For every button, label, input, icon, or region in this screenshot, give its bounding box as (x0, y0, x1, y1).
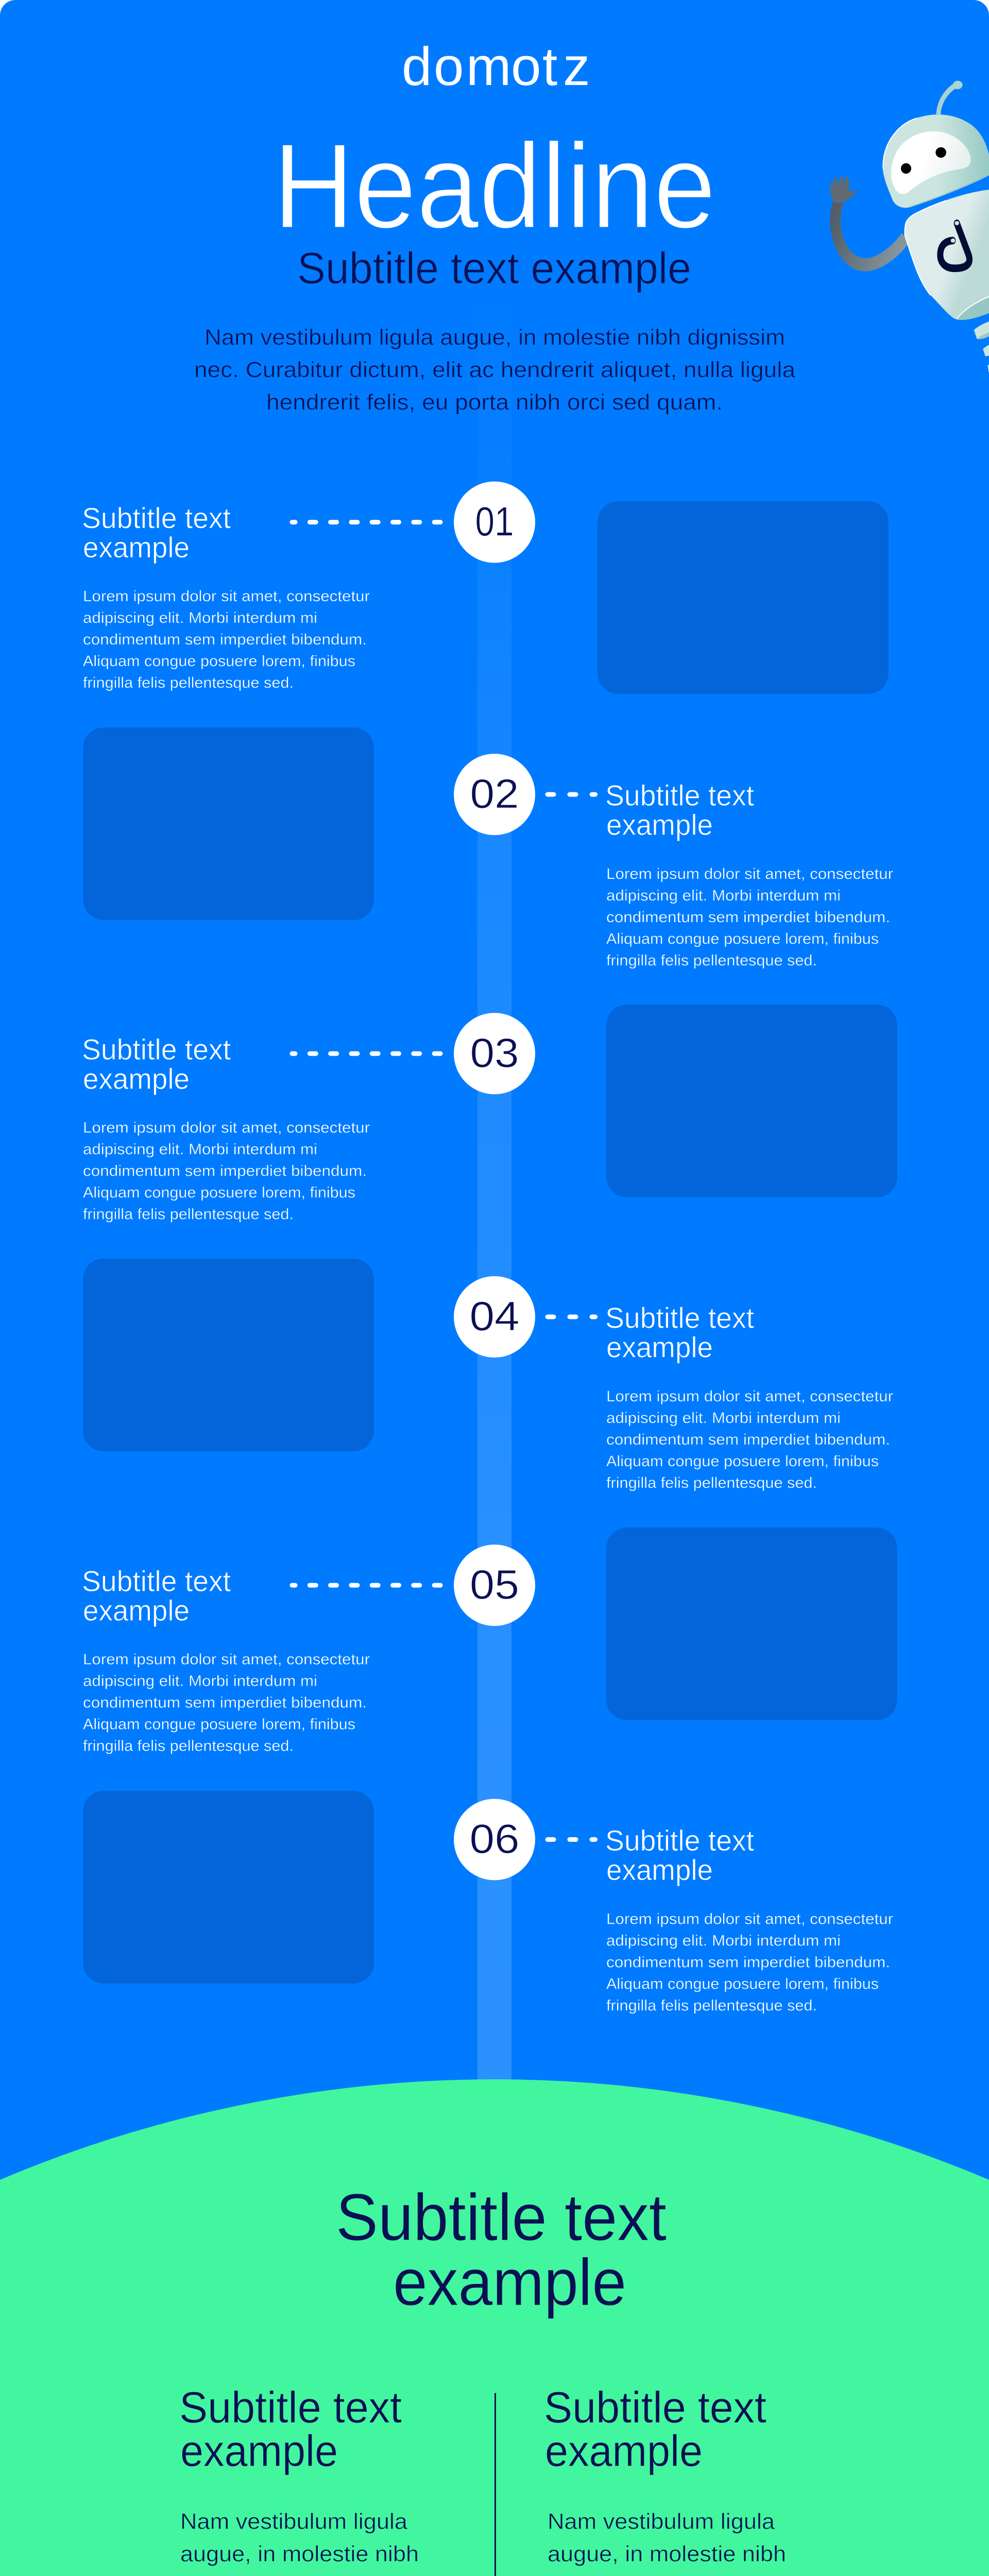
heading 05: example (83, 1594, 190, 1627)
body 02: adipiscing elit. Morbi interdum mi (606, 887, 841, 904)
robot head (882, 114, 989, 208)
robot antenna (939, 81, 963, 114)
right column heading (544, 2383, 766, 2476)
heading 01: example (83, 531, 190, 564)
left column text: augue, in molestie nibh (180, 2542, 419, 2567)
left column heading: Subtitle text (179, 2383, 402, 2432)
badge 02 (454, 754, 535, 835)
body 04 (606, 1388, 893, 1492)
heading 06 (605, 1824, 754, 1887)
badge 02: 02 (470, 771, 519, 817)
heading 04: example (606, 1331, 713, 1364)
connector 01 (292, 520, 440, 524)
body 05: Aliquam congue posuere lorem, finibus (83, 1716, 355, 1733)
heading 06: Subtitle text (605, 1824, 754, 1857)
body 01: adipiscing elit. Morbi interdum mi (83, 609, 317, 626)
body 03: Aliquam congue posuere lorem, finibus (83, 1184, 355, 1201)
robot arm (835, 201, 906, 265)
badge 05 (454, 1545, 535, 1626)
heading 05: Subtitle text (82, 1565, 231, 1598)
heading 03: example (83, 1062, 190, 1095)
body 03: fringilla felis pellentesque sed. (83, 1206, 294, 1223)
body 05: Lorem ipsum dolor sit amet, consectetur (83, 1651, 370, 1668)
image placeholder 4 (83, 1259, 374, 1451)
left column (179, 2383, 441, 2576)
heading 05 (82, 1565, 231, 1627)
heading 04: Subtitle text (605, 1301, 754, 1334)
body 03: Lorem ipsum dolor sit amet, consectetur (83, 1119, 370, 1137)
connector 05 (292, 1583, 440, 1588)
timeline spine (478, 289, 511, 2123)
step 05 (82, 1545, 535, 1755)
step 03 (82, 1013, 535, 1223)
robot torso (905, 190, 989, 320)
body 05: adipiscing elit. Morbi interdum mi (83, 1672, 317, 1690)
section heading: example (393, 2246, 626, 2319)
body 04: adipiscing elit. Morbi interdum mi (606, 1410, 841, 1427)
body 04: Lorem ipsum dolor sit amet, consectetur (606, 1388, 893, 1405)
connector 06 (548, 1837, 595, 1842)
body 04: Aliquam congue posuere lorem, finibus (606, 1453, 879, 1470)
right column heading: Subtitle text (544, 2383, 766, 2432)
connector 04 (548, 1315, 595, 1319)
body 01: condimentum sem imperdiet bibendum. (83, 631, 367, 648)
section heading: Subtitle text (336, 2181, 667, 2255)
badge 06: 06 (470, 1816, 519, 1862)
right column heading: example (545, 2427, 703, 2476)
body 02: fringilla felis pellentesque sed. (606, 952, 817, 969)
heading 03 (82, 1033, 231, 1095)
section heading (336, 2181, 667, 2319)
body 06 (606, 1910, 893, 2014)
panel: green hill section (0, 2079, 989, 2576)
intro paragraph: Nam vestibulum ligula augue, in molestie nibh dignissim (204, 325, 785, 350)
body 03 (83, 1119, 370, 1223)
badge 04: 04 (470, 1293, 519, 1339)
right column (544, 2383, 808, 2576)
robot spring rings (974, 321, 989, 372)
badge 01 (454, 481, 535, 563)
badge 03 (454, 1013, 535, 1094)
body 02: condimentum sem imperdiet bibendum. (606, 909, 890, 926)
body 02: Lorem ipsum dolor sit amet, consectetur (606, 866, 893, 883)
image placeholder 1 (598, 501, 889, 694)
heading 01: Subtitle text (82, 502, 231, 535)
heading 01 (82, 502, 231, 564)
body 05: condimentum sem imperdiet bibendum. (83, 1694, 367, 1711)
left column heading (179, 2383, 402, 2476)
image placeholder 6 (83, 1791, 374, 1984)
right column text: augue, in molestie nibh (548, 2542, 786, 2567)
column divider (494, 2393, 496, 2576)
connector 03 (292, 1051, 440, 1056)
body 06: fringilla felis pellentesque sed. (606, 1997, 817, 2014)
heading 02: example (606, 809, 713, 842)
body 06: Lorem ipsum dolor sit amet, consectetur (606, 1910, 893, 1928)
body 06: adipiscing elit. Morbi interdum mi (606, 1932, 841, 1950)
left column text: Nam vestibulum ligula (180, 2510, 407, 2534)
step 02 (454, 754, 893, 969)
image placeholder 2 (83, 727, 374, 920)
body 02 (606, 866, 893, 969)
heading 06: example (606, 1854, 713, 1887)
step 06 (454, 1799, 893, 2014)
heading 02: Subtitle text (605, 779, 754, 812)
right column text: Nam vestibulum ligula (548, 2510, 775, 2534)
icon: robot mascot waving (830, 81, 989, 372)
step 04 (454, 1276, 893, 1492)
body 01: fringilla felis pellentesque sed. (83, 674, 294, 691)
intro paragraph: nec. Curabitur dictum, elit ac hendrerit aliquet, nulla ligula (194, 358, 795, 382)
heading 03: Subtitle text (82, 1033, 231, 1066)
intro paragraph: hendrerit felis, eu porta nibh orci sed quam. (266, 390, 723, 415)
badge 04 (454, 1276, 535, 1358)
image placeholder 3 (606, 1005, 897, 1197)
body 05: fringilla felis pellentesque sed. (83, 1737, 294, 1755)
badge 06 (454, 1799, 535, 1880)
badge 03: 03 (470, 1030, 519, 1076)
body 03: condimentum sem imperdiet bibendum. (83, 1162, 367, 1180)
body 01: Lorem ipsum dolor sit amet, consectetur (83, 588, 370, 605)
body 02: Aliquam congue posuere lorem, finibus (606, 930, 879, 947)
right column text (548, 2510, 808, 2576)
robot hand (830, 176, 856, 203)
body 06: condimentum sem imperdiet bibendum. (606, 1954, 890, 1971)
intro paragraph (194, 325, 795, 415)
heading 02 (605, 779, 754, 842)
badge 05: 05 (470, 1562, 519, 1607)
title: Headline (273, 118, 716, 253)
body 04: fringilla felis pellentesque sed. (606, 1475, 817, 1492)
step 01 (82, 481, 535, 691)
heading 04 (605, 1301, 754, 1364)
subtitle: Subtitle text example (297, 244, 691, 293)
body 05 (83, 1651, 370, 1755)
badge 01: 01 (475, 499, 514, 544)
body 03: adipiscing elit. Morbi interdum mi (83, 1141, 317, 1158)
logo: domotz: domotz (402, 37, 590, 97)
left column text (180, 2510, 441, 2576)
connector 02 (548, 792, 595, 796)
body 04: condimentum sem imperdiet bibendum. (606, 1431, 890, 1448)
body 01 (83, 588, 370, 691)
body 01: Aliquam congue posuere lorem, finibus (83, 653, 355, 670)
body 06: Aliquam congue posuere lorem, finibus (606, 1975, 879, 1993)
left column heading: example (180, 2427, 338, 2476)
image placeholder 5 (606, 1528, 897, 1720)
